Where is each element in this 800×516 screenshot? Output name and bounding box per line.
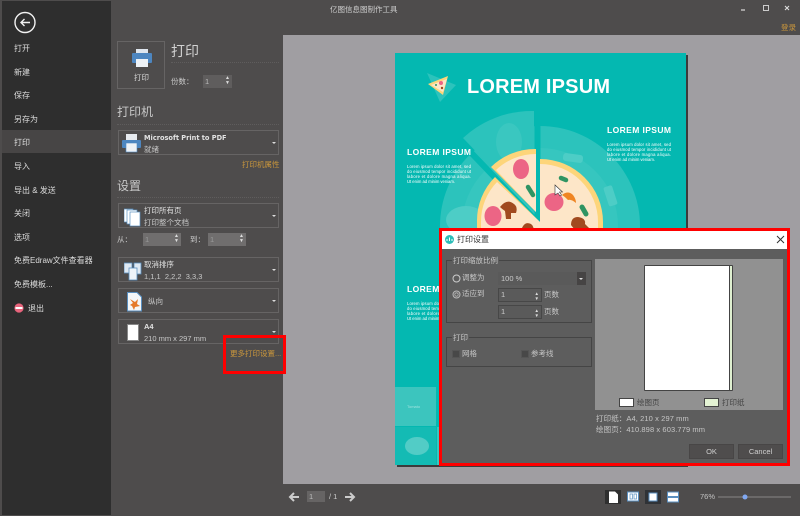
page number: 1 (309, 492, 313, 501)
text block: right: do eiusmod tempor incididunt ut (607, 147, 672, 152)
icon: back arrow (14, 12, 36, 34)
text block: right: LOREM IPSUM (607, 125, 671, 135)
main title: LOREM IPSUM (467, 76, 610, 98)
width spinner: 1 (501, 290, 505, 299)
printer properties link: 打印机属性 (242, 160, 280, 169)
paper size selector: 210 mm x 297 mm (144, 334, 206, 343)
menu items: 关闭 (14, 209, 30, 218)
printer selector (118, 130, 279, 155)
copies spinner: ▲ (225, 75, 230, 81)
menu items: 打印 (14, 138, 30, 147)
view buttons (605, 490, 679, 504)
checkbox: grid: 网格 (462, 349, 477, 358)
printer selector: Microsoft Print to PDF (144, 134, 227, 142)
text block: lower left: Lorem ipsum dolor sit amet, sed (407, 301, 472, 306)
header icon: pizza slice (427, 73, 456, 102)
cancel button (738, 444, 783, 459)
legend: drawing page (619, 398, 660, 407)
menu items: 打开 (14, 44, 30, 53)
print range selector: 打印整个文档 (144, 218, 189, 227)
legend: printing paper: 打印纸 (722, 398, 744, 407)
text block: right: Lorem ipsum dolor sit amet, sed (607, 142, 672, 147)
footer tiles (395, 387, 443, 465)
footer tiles: Tomato (407, 404, 421, 409)
text block: left: Ut enim ad minim veniam. (407, 179, 455, 184)
paper sheet (644, 265, 733, 391)
to label: 到： (190, 235, 205, 244)
menu items: 选项 (14, 233, 30, 242)
red highlight: more settings (223, 335, 286, 374)
icon: printer (122, 134, 141, 152)
from spinner: 1 (145, 235, 149, 244)
dialog title: 打印设置 (457, 235, 489, 244)
collate selector (118, 257, 279, 282)
copies spinner: 1 (205, 77, 209, 86)
width spinner: ▲ (535, 291, 539, 296)
infographic page preview (395, 53, 688, 467)
legend: drawing page: 绘图页 (637, 398, 660, 407)
radio: fit to: 适应到 (462, 289, 484, 298)
print range selector (118, 203, 279, 228)
zoom slider (718, 494, 791, 500)
print range selector: 打印所有页 (144, 206, 182, 215)
text block: left: LOREM IPSUM (407, 147, 471, 157)
menu items: 退出 (28, 304, 44, 313)
ok button: OK (706, 447, 717, 456)
page total: / 1 (329, 492, 337, 501)
cancel button: Cancel (749, 447, 772, 456)
icon: cursor (554, 184, 563, 196)
orientation selector (118, 288, 279, 313)
menu items: 免费Edraw文件查看器 (14, 256, 93, 265)
to spinner: 1 (210, 235, 214, 244)
print label: 打印 (134, 73, 149, 82)
to spinner: ▲ (239, 233, 244, 239)
text block: lower left: do eiusmod tempor incididunt ut (407, 306, 472, 311)
menu items: 另存为 (14, 115, 38, 124)
icon: close (776, 236, 784, 244)
icon: collate (124, 262, 142, 280)
menu items: 免费模板... (14, 280, 53, 289)
to spinner: ▼ (239, 238, 244, 244)
icon: exit (14, 303, 24, 313)
copies spinner (203, 75, 232, 88)
icon: pages (124, 208, 140, 226)
text block: lower left (407, 284, 472, 321)
paper size selector (118, 319, 279, 344)
height spinner: ▲ (535, 308, 539, 313)
menu items: 保存 (14, 91, 30, 100)
paper info: 打印纸：A4, 210 x 297 mm (596, 414, 689, 423)
icon: paper (127, 324, 139, 341)
legend: printing paper (704, 398, 744, 407)
panel: preview area (283, 35, 800, 484)
width spinner (498, 288, 542, 302)
drawing page info: 绘图页：410.898 x 603.779 mm (596, 425, 705, 434)
radio: adjust to: 调整为 (462, 273, 484, 282)
collate selector: 取消排序 (144, 260, 174, 269)
scale dropdown: 100 % (501, 274, 522, 283)
paper size selector: A4 (144, 322, 154, 331)
text block: lower left: labore et dolore magna aliqua. (407, 311, 471, 316)
height spinner: ▼ (535, 313, 539, 318)
height spinner: 1 (501, 307, 505, 316)
group: print (446, 337, 592, 367)
text block: left: Lorem ipsum dolor sit amet, sed (407, 164, 472, 169)
checkbox: grid (453, 349, 477, 358)
heading: printer: 打印机 (117, 105, 153, 119)
menu items: 导出 & 发送 (14, 186, 56, 195)
collate selector: 1,1,1 2,2,2 3,3,3 (144, 272, 202, 281)
page navigation (288, 491, 356, 502)
login link: 登录 (781, 23, 796, 32)
text block: lower left: LOREM IPSUM (407, 284, 471, 294)
text block: left (407, 147, 472, 184)
radio: adjust to (452, 273, 484, 282)
window title: 亿图信息图制作工具 (330, 5, 398, 14)
printer selector: 就绪 (144, 145, 159, 154)
text block: left: do eiusmod tempor incididunt ut (407, 169, 472, 174)
dropdown button (577, 272, 586, 285)
dialog: print settings (439, 228, 790, 466)
panel: page preview (595, 259, 783, 410)
ok button (689, 444, 734, 459)
group title: 打印 (453, 333, 468, 342)
height label: 页数 (544, 307, 559, 316)
selected item highlight (2, 130, 111, 153)
drawing page (645, 266, 730, 390)
icon: next (345, 492, 356, 502)
from spinner: ▼ (174, 238, 179, 244)
page number (307, 491, 325, 502)
from spinner: ▲ (174, 233, 179, 239)
dialog title bar (442, 231, 787, 249)
copies spinner: ▼ (225, 80, 230, 86)
icon: previous (288, 492, 299, 502)
menu items: 导入 (14, 162, 30, 171)
copies label: 份数： (171, 77, 194, 86)
pizza background rings (440, 100, 640, 326)
scale dropdown (498, 272, 586, 285)
group: print scale (446, 260, 592, 323)
heading: settings: 设置 (117, 179, 141, 193)
heading: print: 打印 (171, 43, 199, 59)
window controls (741, 5, 790, 11)
height spinner (498, 305, 542, 319)
text block: right: Ut enim ad minim veniam. (607, 157, 655, 162)
icon: dialog logo (445, 235, 454, 244)
orientation selector: 纵向 (148, 297, 163, 306)
panel: sidebar (2, 1, 111, 515)
checkbox: guide lines: 参考线 (531, 349, 554, 358)
icon: printer (132, 49, 152, 67)
more print settings link: 更多打印设置... (230, 349, 281, 358)
text block: right (607, 125, 672, 162)
print button (117, 41, 165, 89)
menu items (14, 44, 93, 313)
from spinner (143, 233, 181, 246)
width label: 页数 (544, 290, 559, 299)
text block: left: labore et dolore magna aliqua. (407, 174, 471, 179)
text block: lower left: Ut enim ad minim veniam. (407, 316, 455, 321)
text block: right: labore et dolore magna aliqua. (607, 152, 671, 157)
menu items: 新建 (14, 68, 30, 77)
icon: portrait page (127, 292, 142, 312)
radio: fit to (452, 289, 484, 298)
zoom percent: 76% (700, 492, 715, 501)
to spinner (208, 233, 246, 246)
group title: 打印缩放比例 (453, 256, 498, 265)
from label: 从： (117, 235, 132, 244)
pizza (477, 149, 603, 240)
width spinner: ▼ (535, 296, 539, 301)
